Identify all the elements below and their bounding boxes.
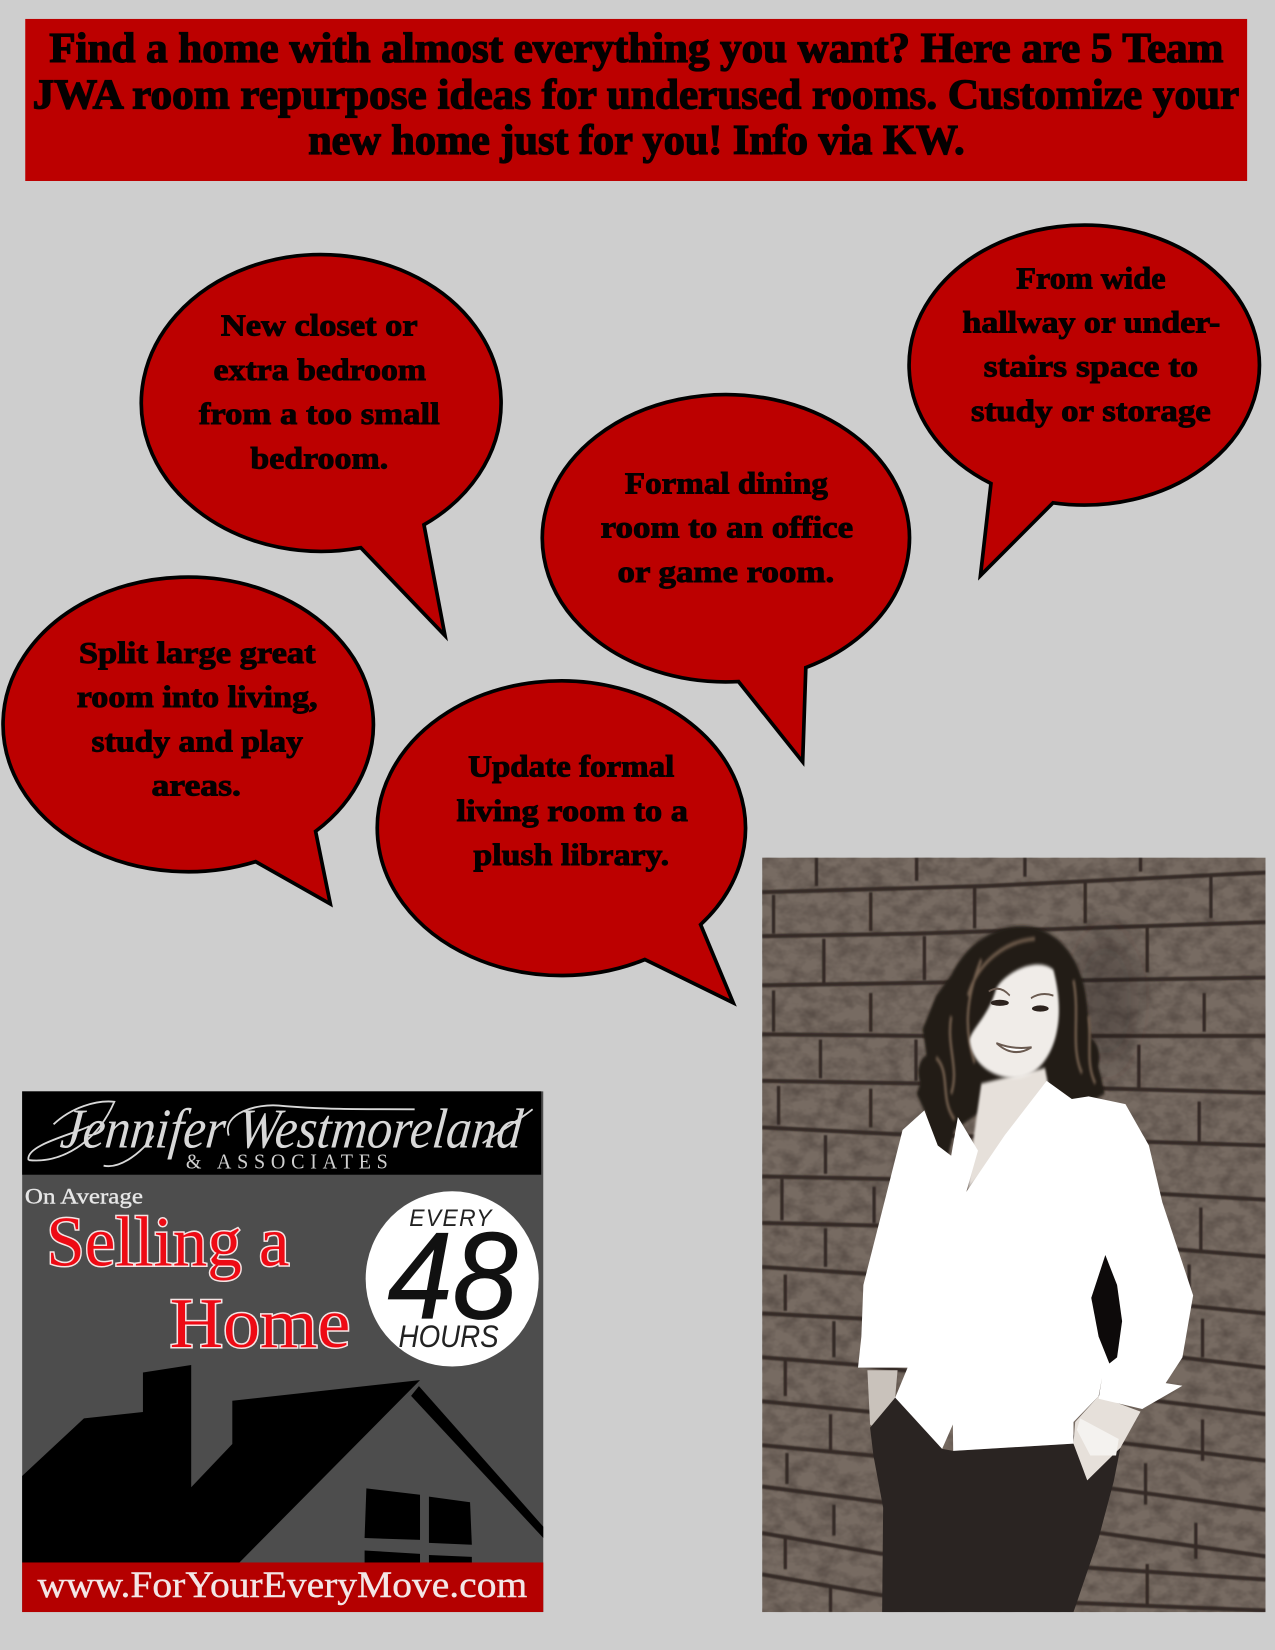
- speech bubble: new closet: New closet or: [221, 308, 418, 343]
- selling a home headline: [46, 1203, 350, 1363]
- speech bubble: great room: room into living,: [77, 679, 318, 714]
- title text: [33, 26, 1239, 164]
- title text: new home just for you! Info via KW.: [308, 118, 965, 164]
- shadow behind hair: [1072, 934, 1139, 1068]
- speech bubble: great room: study and play: [92, 723, 303, 758]
- logo ad panel: [22, 1091, 544, 1612]
- speech bubble: hallway: study or storage: [971, 393, 1211, 428]
- speech bubble: new closet: bedroom.: [250, 440, 388, 475]
- hand in pocket and wrist: [1074, 1396, 1141, 1480]
- brick wall: [762, 858, 1266, 1612]
- speech bubble: library: Update formal: [468, 749, 675, 784]
- speech bubble: library: [377, 681, 745, 1003]
- speech bubble: library: plush library.: [473, 837, 669, 872]
- hair: [917, 926, 1105, 1157]
- face and neck: [968, 965, 1059, 1189]
- title text: JWA room repurpose ideas for underused rooms. Customize your: [33, 72, 1239, 118]
- speech bubble: formal dining: or game room.: [618, 554, 834, 589]
- speech bubble: hallway: hallway or under-: [963, 305, 1220, 340]
- speech bubble: new closet: extra bedroom: [214, 352, 426, 387]
- logo header band: Jennifer Westmoreland: [58, 1098, 526, 1160]
- jeans: [870, 1398, 1120, 1612]
- speech bubble: library: living room to a: [457, 793, 689, 828]
- title text: Find a home with almost everything you want? Here are 5 Team: [49, 26, 1223, 72]
- icon: every 48 hours badge: HOURS: [399, 1318, 499, 1354]
- website url band: [22, 1562, 543, 1612]
- title banner: [25, 19, 1247, 181]
- shadow gap at waist: [1091, 1255, 1122, 1364]
- website url band: www.ForYourEveryMove.com: [37, 1564, 527, 1605]
- logo header band: [22, 1091, 541, 1175]
- on average label: On Average: [25, 1183, 143, 1208]
- icon: house roof silhouette: [22, 1365, 543, 1562]
- speech bubble: great room: [3, 577, 373, 904]
- icon: every 48 hours badge: [366, 1191, 539, 1367]
- white watch: [1077, 1418, 1119, 1456]
- speech bubble: formal dining: room to an office: [601, 510, 853, 545]
- speech bubble: new closet: [141, 255, 501, 636]
- speech bubble: formal dining: [542, 395, 909, 762]
- white shirt: [858, 1081, 1193, 1451]
- selling a home headline: Selling a: [46, 1203, 290, 1282]
- left forearm: [867, 1370, 898, 1430]
- speech bubble: hallway: From wide: [1016, 260, 1166, 295]
- portrait photo: [762, 858, 1266, 1612]
- speech bubble: great room: areas.: [151, 768, 241, 803]
- speech bubble: hallway: [909, 225, 1259, 576]
- logo header band: & ASSOCIATES: [186, 1151, 388, 1174]
- woman figure: [858, 926, 1193, 1612]
- speech bubble: formal dining: Formal dining: [625, 466, 828, 501]
- speech bubble: new closet: from a too small: [199, 396, 440, 431]
- selling a home headline: Home: [170, 1284, 350, 1363]
- icon: every 48 hours badge: 48: [387, 1207, 518, 1345]
- icon: every 48 hours badge: EVERY: [409, 1204, 494, 1231]
- speech bubble: hallway: stairs space to: [984, 349, 1198, 384]
- speech bubble: great room: Split large great: [79, 635, 316, 670]
